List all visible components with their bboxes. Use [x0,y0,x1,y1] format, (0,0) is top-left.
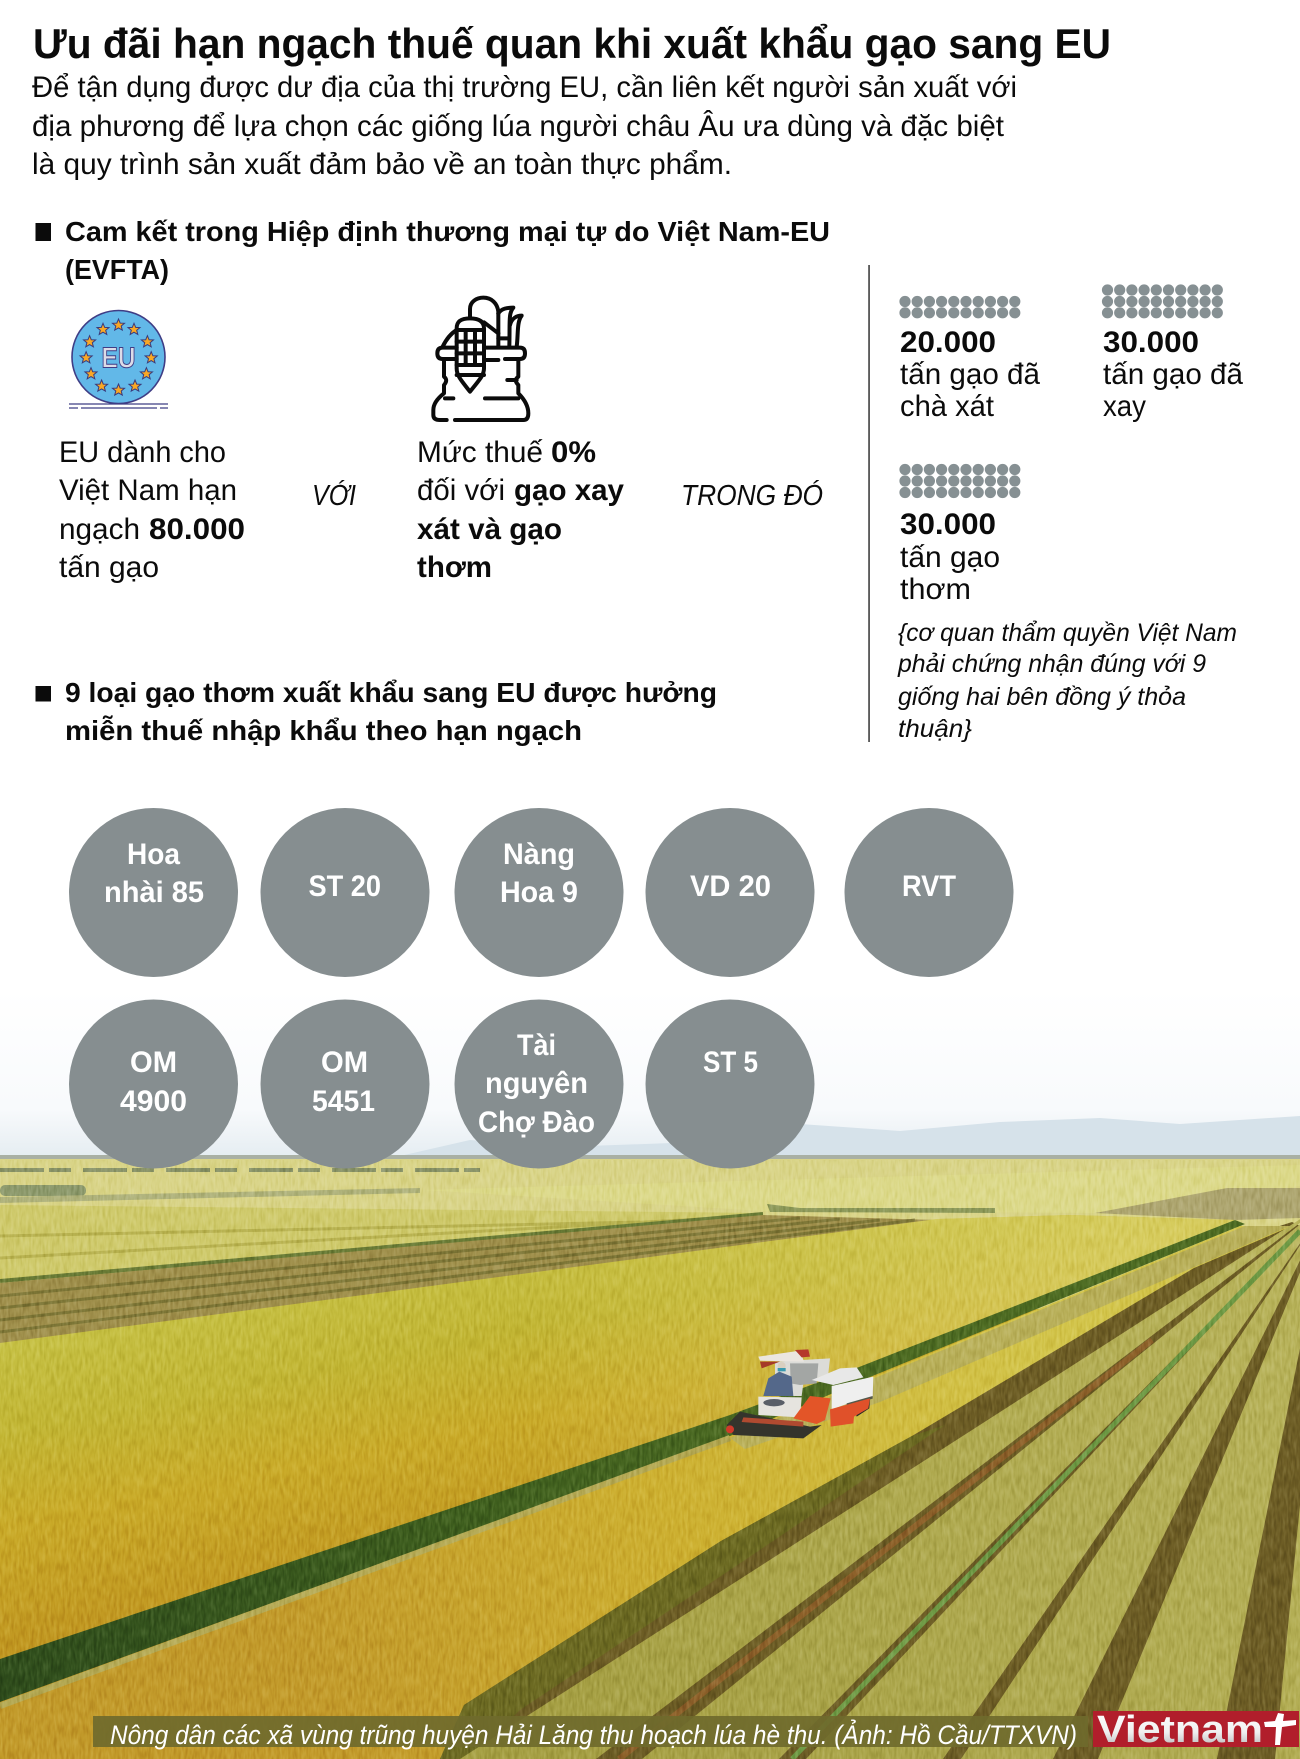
variety: VD 20 [646,808,814,977]
heading: EVFTA commitment: (EVFTA) [65,254,169,285]
heading: nine fragrant rice varieties: 9 loại gạo thơm xuất khẩu sang EU được hưởng [65,677,717,708]
variety: Hoa nhài 85: Hoa [127,838,181,871]
text: EU quota: EU dành cho [59,436,226,469]
text: zero tariff: đối với [417,474,505,507]
panel: 30,000 tons fragrant rice: thơm [900,573,971,606]
text: zero tariff [417,436,625,584]
panel: 20,000 tons milled rice: chà xát [900,390,994,423]
icon: rice sack with grain [433,298,528,420]
icon: dot grid 30 fragrant [905,470,1017,492]
panel: 30,000 tons husked rice: xay [1103,390,1146,423]
variety: ST 5 [646,1000,814,1168]
text: zero tariff: 0% [551,436,596,469]
field base [0,1159,1300,1759]
divider line [868,265,870,742]
icon: EU coin: EU [102,342,136,374]
left middle field [0,1205,763,1281]
panel: 20,000 tons milled rice [900,302,1041,423]
heading: EVFTA commitment [36,216,830,285]
variety: OM 4900: OM [130,1046,177,1079]
panel: 30,000 tons husked rice: 30.000 [1103,326,1199,359]
crop texture [0,1160,1300,1759]
variety: Hoa nhài 85 [69,808,238,977]
distant mountains [400,1116,1300,1158]
text: zero tariff: thơm [417,551,492,584]
heading: nine fragrant rice varieties: miễn thuế nhập khẩu theo hạn ngạch [65,715,582,746]
background photo: harvested rice fields [0,990,1300,1759]
variety: OM 5451 [260,1000,430,1168]
photo caption: Nông dân các xã vùng trũng huyện Hải Lăng thu hoạch lúa hè thu. (Ảnh: Hồ Cầu/TTXVN) [110,1719,1077,1750]
panel: 30,000 tons husked rice [1103,290,1244,423]
icon: dot grid 30 [1108,290,1219,313]
variety: RVT [844,808,1014,977]
variety: OM 5451: OM [321,1046,368,1079]
panel: 30,000 tons fragrant rice [900,470,1017,606]
icon: EU coin [69,310,168,408]
windrows [460,1200,1300,1759]
variety: Tài nguyên Chợ Đào: nguyên [485,1067,588,1100]
variety: ST 5: ST 5 [703,1046,758,1079]
intro paragraph [32,71,1017,181]
variety: OM 4900 [69,1000,238,1168]
note: certification: {cơ quan thẩm quyền Việt Nam [898,619,1237,647]
variety: Tài nguyên Chợ Đào: Chợ Đào [478,1106,595,1139]
note: certification [897,619,1237,743]
variety: Nàng Hoa 9: Hoa 9 [500,876,578,909]
panel: 30,000 tons fragrant rice: 30.000 [900,508,996,541]
text: EU quota: 80.000 [149,513,245,546]
variety: Tài nguyên Chợ Đào [454,1000,624,1168]
title: Ưu đãi hạn ngạch thuế quan khi xuất khẩu gạo sang EU [33,20,1111,67]
combine harvester [726,1349,873,1438]
text: zero tariff: Mức thuế [417,436,543,469]
variety: VD 20: VD 20 [690,870,771,903]
variety: Hoa nhài 85: nhài 85 [104,876,204,909]
text: zero tariff: gạo xay [514,474,625,507]
far pale fields [0,1159,1300,1309]
big gold field [0,1215,1235,1662]
field edge windrow [0,1438,730,1706]
text: EU quota: tấn gạo [59,551,159,584]
panel: 30,000 tons fragrant rice: tấn gạo [900,541,1000,574]
text: EU quota: Việt Nam hạn [59,474,237,507]
text: zero tariff: xát và gạo [417,513,562,546]
thin green and red strips [792,1231,1300,1759]
panel: 20,000 tons milled rice: 20.000 [900,326,996,359]
second gold field [0,1226,1292,1759]
panel: 20,000 tons milled rice: tấn gạo đã [900,358,1041,391]
sky [0,990,1300,1160]
note: certification: giống hai bên đồng ý thỏa [898,683,1186,711]
tree strip [767,1204,995,1213]
shadow band [440,1425,945,1759]
intro paragraph: Để tận dụng được dư địa của thị trường EU, cần liên kết người sản xuất với [32,71,1017,104]
horizon tree line [0,1155,1300,1159]
intro paragraph: địa phương để lựa chọn các giống lúa người châu Âu ưa dùng và đặc biệt [32,110,1004,143]
connector word: of which: TRONG ĐÓ [681,479,823,512]
brown striped field [0,1215,937,1344]
panel: 30,000 tons husked rice: tấn gạo đã [1103,358,1244,391]
variety: Tài nguyên Chợ Đào: Tài [517,1029,556,1062]
variety: Nàng Hoa 9 [454,808,624,977]
variety: RVT: RVT [902,870,956,903]
variety: ST 20: ST 20 [308,870,381,903]
note: certification: thuận} [898,715,972,743]
variety: ST 20 [260,808,430,977]
note: certification: phải chứng nhận đúng với 9 [897,650,1206,678]
right base soil [400,1222,1300,1759]
variety: Nàng Hoa 9: Nàng [503,838,575,871]
variety: OM 4900: 4900 [120,1085,187,1118]
variety: OM 5451: 5451 [312,1085,375,1118]
text: EU quota [59,436,245,584]
icon: dot grid 20 [905,302,1017,313]
heading: nine fragrant rice varieties [36,677,717,746]
intro paragraph: là quy trình sản xuất đảm bảo về an toàn thực phẩm. [32,148,732,181]
connector word: with: VỚI [312,479,356,512]
upper right pale field [423,1165,1300,1213]
text: EU quota: ngạch [59,513,140,546]
far right brown patch [1095,1188,1300,1220]
logo: Vietnam+: Vietnam [1097,1709,1263,1751]
heading: EVFTA commitment: Cam kết trong Hiệp định thương mại tự do Việt Nam-EU [65,216,830,247]
green strip [0,1220,1245,1705]
